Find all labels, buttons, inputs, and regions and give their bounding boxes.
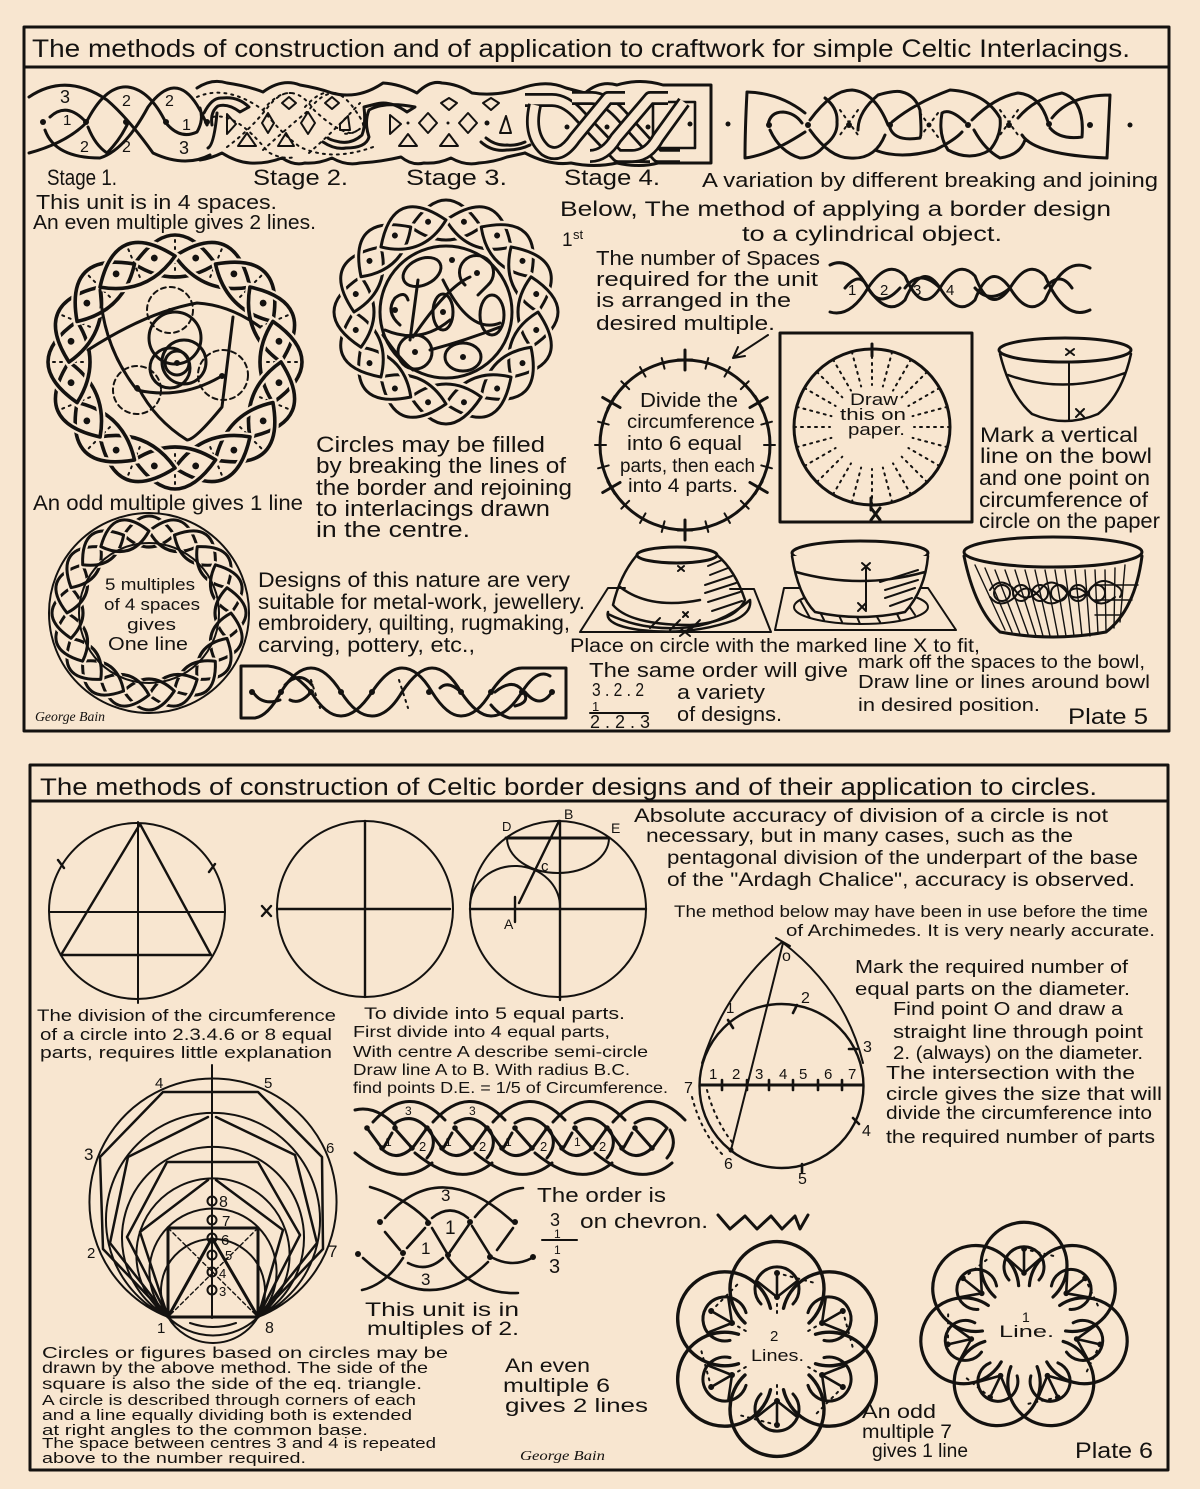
text: number of spaces: is arranged in the — [596, 290, 791, 312]
border stage 1: 2 — [122, 93, 131, 110]
arrow to circle — [733, 335, 768, 358]
diagram: division by diameter: 6 — [824, 1066, 832, 1083]
text: mark vertical: circumference of — [979, 489, 1148, 512]
text: circles or figures: at right angles to the common base. — [42, 1422, 368, 1439]
chevron icon — [718, 1215, 808, 1229]
text: mark required: Mark the required number of — [855, 957, 1129, 977]
text: divide caption: into 4 parts. — [628, 476, 738, 497]
text: unit multiples: multiples of 2. — [367, 1319, 519, 1340]
diagram: division by diameter: 1 — [709, 1066, 717, 1083]
text: mark required — [855, 957, 1162, 1147]
border: unit in multiples of 2: 3 — [441, 1186, 450, 1205]
text: number of spaces: The number of Spaces — [596, 248, 820, 270]
circle: divide circumference — [595, 350, 775, 540]
text: ring caption: gives — [127, 615, 176, 634]
text: method below: The method below may have been in use before the time — [674, 902, 1148, 921]
border stage 1: 2 — [165, 93, 174, 110]
diagram: nested polygons: 4 — [155, 1075, 163, 1092]
text: mark required: straight line through point — [893, 1022, 1143, 1042]
border stage 4 — [525, 82, 730, 166]
text: order — [537, 1185, 708, 1278]
text: division explanation: The division of the circumference — [37, 1006, 336, 1025]
stage labels: Stage 1. — [47, 165, 117, 190]
text: mark off: Draw line or lines around bowl — [858, 672, 1150, 692]
text: mark required: the required number of parts — [886, 1127, 1155, 1147]
diagram: division by diameter: 5 — [799, 1066, 807, 1083]
text: ring caption: 5 multiples — [105, 575, 195, 594]
panel: plate 6 — [30, 765, 1168, 1470]
diagram: division by diameter: 1 — [726, 1000, 734, 1017]
text: circles filled: Circles may be filled — [316, 432, 545, 457]
text: cylindrical heading — [560, 198, 1111, 251]
text: circles or figures: above to the number required. — [42, 1450, 306, 1467]
text: order: 3 — [550, 1210, 560, 1230]
stage labels: Stage 3. — [406, 165, 507, 190]
text: five equal parts: find points D.E. = 1/5 of Circumference. — [353, 1080, 668, 1097]
text: ring caption: of 4 spaces — [104, 595, 200, 614]
text: circles filled: to interlacings drawn — [316, 496, 550, 521]
text: odd multiple 7: multiple 7 — [862, 1422, 952, 1443]
border stage 1 — [29, 85, 210, 161]
diagram: nested polygons: 7 — [328, 1242, 337, 1261]
diagram: division by diameter: 2 — [801, 990, 810, 1007]
text: circles filled: by breaking the lines of — [316, 453, 567, 478]
bowl: with decorative band — [964, 537, 1142, 637]
circle: five division — [470, 806, 646, 1000]
diagram: division by diameter: 3 — [863, 1039, 872, 1056]
text: mark vertical: and one point on — [979, 467, 1150, 490]
diagram: nested polygons: 1 — [157, 1320, 165, 1337]
circle: cross division — [262, 821, 453, 997]
plate label 5: Plate 5 — [1068, 704, 1148, 729]
ring: six fold two lines: 2 — [770, 1328, 778, 1345]
text: mark vertical: Mark a vertical — [980, 424, 1138, 447]
border: unit in multiples of 2 — [355, 1186, 536, 1293]
text: even multiple: gives 2 lines — [505, 1396, 648, 1417]
text: cylindrical heading: 1 — [562, 230, 573, 251]
diagram: nested polygons: 2 — [87, 1245, 95, 1262]
text: absolute accuracy: of the "Ardagh Chalice", accuracy is observed. — [667, 870, 1135, 891]
diagram: division by diameter: 7 — [848, 1066, 856, 1083]
text: designs suitable: Designs of this nature are very — [258, 569, 571, 592]
border numbered spaces: 3 — [913, 282, 921, 299]
text: same order: 2 . 2 . 3 — [590, 712, 650, 732]
text: odd multiple: An odd multiple gives 1 line — [33, 492, 303, 515]
text: mark off: mark off the spaces to the bowl, — [858, 652, 1145, 672]
border: woven repeat: 3 — [405, 1104, 412, 1118]
border: unit in multiples of 2: 3 — [421, 1270, 430, 1289]
border: woven repeat: 1 — [574, 1135, 581, 1149]
text: same order: of designs. — [677, 704, 782, 726]
text: circles filled: the border and rejoining — [316, 475, 572, 500]
border stage 1: 3 — [179, 138, 189, 158]
text: same order: The same order will give — [589, 660, 848, 682]
text: five equal parts — [353, 1004, 668, 1097]
text: same order: 1 — [592, 699, 599, 714]
text: mark required: The intersection with the — [886, 1063, 1135, 1083]
diagram: nested polygons: 6 — [326, 1140, 334, 1157]
text: mark vertical: line on the bowl — [980, 445, 1152, 468]
text: order: The order is — [537, 1185, 666, 1207]
text: unit multiples — [365, 1300, 519, 1340]
text: mark required: equal parts on the diameter. — [855, 979, 1130, 999]
circle: five division: A — [504, 916, 514, 932]
text: designs suitable: suitable for metal-work, jewellery. — [258, 591, 585, 614]
text: mark required: Find point O and draw a — [893, 999, 1124, 1019]
paper square with circle — [780, 333, 972, 522]
title: plate 6: The methods of construction of Celtic border designs and of their application to circles. — [40, 774, 1097, 801]
ring: filled circle — [329, 195, 563, 429]
border: woven repeat: 2 — [479, 1139, 486, 1154]
text: designs suitable: carving, pottery, etc., — [258, 634, 475, 657]
ring: six fold two lines: Lines. — [751, 1346, 804, 1365]
diagram: nested polygons — [84, 1065, 337, 1343]
circle: five division: E — [611, 820, 620, 836]
text: same order: 3 . 2 . 2 — [592, 680, 644, 700]
border bottom — [241, 666, 566, 718]
circle: triangle division — [49, 822, 225, 1003]
text: even multiple: An even — [505, 1356, 590, 1377]
border: unit in multiples of 2: 1 — [445, 1218, 456, 1239]
paper square with circle: this on — [840, 405, 906, 424]
bowl: inverted on paper — [580, 547, 771, 636]
text: method below — [674, 902, 1155, 940]
panel: plate 5 — [24, 27, 1169, 732]
text: designs suitable: embroidery, quilting, rugmaking, — [258, 612, 570, 635]
text: unit spaces: An even multiple gives 2 lines. — [33, 212, 316, 234]
text: circles or figures — [42, 1345, 448, 1467]
diagram: nested polygons: 4 — [219, 1266, 226, 1281]
text: cylindrical heading: st — [573, 227, 584, 242]
text: circles or figures: drawn by the above method. The side of the — [42, 1360, 428, 1377]
ring: seven fold one line: Line. — [999, 1322, 1054, 1341]
diagram: nested polygons: 5 — [225, 1248, 232, 1263]
text: odd multiple 7: gives 1 line — [872, 1441, 968, 1462]
diagram: division by diameter: 5 — [798, 1171, 807, 1188]
text: absolute accuracy — [634, 806, 1138, 891]
text: divide caption: Divide the — [640, 390, 738, 412]
text: divide caption: into 6 equal — [627, 433, 742, 455]
text: order: 3 — [549, 1256, 560, 1278]
text: order: on chevron. — [580, 1211, 708, 1233]
ring: six fold two lines — [660, 1242, 894, 1456]
text: five equal parts: With centre A describe semi-circle — [353, 1044, 648, 1061]
diagram: nested polygons: 6 — [221, 1232, 229, 1249]
stage labels: Stage 4. — [564, 165, 660, 190]
text: circles filled — [316, 432, 572, 542]
text: circles or figures: A circle is described through corners of each — [42, 1392, 416, 1409]
text: divide caption: parts, then each — [620, 456, 755, 477]
stage labels: A variation by different breaking and joining — [702, 170, 1158, 192]
text: circles or figures: square is also the side of the eq. triangle. — [42, 1376, 422, 1393]
text: number of spaces: desired multiple. — [596, 313, 775, 335]
diagram: division by diameter — [684, 938, 872, 1188]
text: number of spaces — [596, 248, 820, 335]
text: mark off — [858, 652, 1150, 715]
border: woven repeat: 1 — [505, 1135, 512, 1149]
text: five equal parts: First divide into 4 equal parts, — [353, 1024, 610, 1041]
text: division explanation: of a circle into 2.3.4.6 or 8 equal — [40, 1025, 332, 1044]
border stage 1: 1 — [182, 117, 191, 134]
ring: even multiple — [42, 229, 308, 495]
title: plate 5: The methods of construction and of application to craftwork for simple Celtic Interlacings. — [32, 35, 1130, 63]
border numbered spaces: 2 — [880, 282, 888, 299]
text: mark off: in desired position. — [858, 695, 1040, 715]
text: circles or figures: The space between centres 3 and 4 is repeated — [42, 1435, 436, 1452]
circle: five division: D — [502, 819, 511, 834]
text: five equal parts: To divide into 5 equal parts. — [364, 1004, 625, 1023]
diagram: division by diameter: 4 — [779, 1066, 787, 1083]
text: ring caption: One line — [108, 634, 188, 654]
ring: seven fold one line — [912, 1222, 1136, 1440]
plate label 6: Plate 6 — [1075, 1438, 1153, 1463]
text: cylindrical heading: Below, The method of applying a border design — [560, 198, 1111, 221]
bowl: upright on paper — [775, 541, 956, 630]
border: woven repeat: 2 — [540, 1139, 547, 1154]
paper square with circle: Draw — [850, 390, 899, 409]
text: mark required: 2. (always) on the diameter. — [893, 1043, 1143, 1063]
border: woven repeat: 2 — [599, 1139, 606, 1154]
border stage 1: 2 — [122, 139, 131, 156]
border stage 1: 2 — [80, 139, 89, 156]
circle: five division: c — [541, 858, 549, 875]
circle: five division: B — [564, 806, 573, 822]
text: even multiple: multiple 6 — [503, 1376, 610, 1397]
text: circles filled: in the centre. — [316, 517, 470, 542]
text: circles or figures: and a line equally dividing both is extended — [42, 1407, 412, 1424]
text: same order — [589, 660, 848, 732]
stage labels — [47, 165, 1158, 192]
text: mark vertical — [979, 424, 1160, 533]
border numbered spaces: 4 — [946, 282, 954, 299]
diagram: division by diameter: 6 — [724, 1156, 733, 1173]
text: even multiple — [503, 1356, 648, 1417]
border stage 1: 1 — [63, 112, 71, 129]
border stages 2 and 3 — [197, 81, 585, 164]
diagram: nested polygons: 3 — [84, 1145, 93, 1164]
text: mark vertical: circle on the paper — [979, 510, 1160, 533]
text: five equal parts: Draw line A to B. With radius B.C. — [353, 1062, 630, 1079]
text: absolute accuracy: pentagonal division of the underpart of the base — [667, 848, 1138, 869]
diagram: nested polygons: 5 — [264, 1075, 272, 1092]
text: divide caption: circumference — [627, 412, 755, 433]
text: order: 1 — [554, 1243, 561, 1257]
stage labels: Stage 2. — [253, 165, 348, 190]
text: mark required: divide the circumference into — [886, 1103, 1152, 1123]
signature: plate 6: George Bain — [520, 1449, 605, 1464]
text: ring caption — [104, 575, 200, 654]
text: mark required: circle gives the size that will — [886, 1084, 1162, 1104]
text: number of spaces: required for the unit — [596, 269, 819, 291]
diagram: nested polygons: 8 — [265, 1320, 274, 1337]
border numbered spaces — [830, 263, 1090, 313]
bowl: marked — [999, 338, 1131, 421]
text: method below: of Archimedes. It is very nearly accurate. — [786, 921, 1155, 940]
text: unit multiples: This unit is in — [365, 1300, 519, 1321]
text: division explanation: parts, requires little explanation — [40, 1043, 332, 1062]
text: odd multiple 7: An odd — [862, 1402, 936, 1423]
text: unit spaces: This unit is in 4 spaces. — [36, 192, 277, 214]
diagram: division by diameter: o — [782, 948, 791, 965]
text: division explanation — [37, 1006, 336, 1062]
border: woven repeat: 2 — [419, 1139, 426, 1154]
ring: five multiples — [49, 513, 249, 713]
text: absolute accuracy: Absolute accuracy of division of a circle is not — [634, 806, 1109, 827]
signature: plate 5: George Bain — [35, 710, 105, 725]
diagram: division by diameter: 2 — [732, 1066, 740, 1083]
border: woven repeat: 3 — [469, 1104, 476, 1118]
border variation — [745, 90, 1132, 158]
text: designs suitable — [258, 569, 585, 657]
ring: seven fold one line: 1 — [1022, 1309, 1030, 1325]
diagram: nested polygons: 7 — [222, 1213, 230, 1230]
border: woven repeat: 1 — [445, 1135, 452, 1149]
paper square with circle: paper. — [848, 420, 905, 439]
text: place on circle: Place on circle with the marked line X to fit, — [570, 636, 980, 657]
text: divide caption — [620, 390, 755, 497]
text: cylindrical heading: to a cylindrical object. — [742, 223, 1002, 246]
diagram: nested polygons: 8 — [219, 1194, 228, 1211]
text: same order: a variety — [677, 682, 765, 704]
text: unit spaces — [33, 192, 316, 234]
text: circles or figures: Circles or figures based on circles may be — [42, 1345, 448, 1362]
diagram: division by diameter: 7 — [684, 1080, 693, 1097]
border: woven repeat — [355, 1101, 685, 1174]
diagram: division by diameter: 3 — [755, 1066, 763, 1083]
border stage 1: 3 — [60, 87, 70, 107]
diagram: division by diameter: 4 — [862, 1123, 871, 1140]
text: odd multiple 7 — [862, 1402, 968, 1462]
diagram: nested polygons: 3 — [219, 1284, 226, 1299]
border: woven repeat: 1 — [385, 1135, 392, 1149]
text: absolute accuracy: necessary, but in many cases, such as the — [646, 826, 1073, 847]
border: unit in multiples of 2: 1 — [421, 1239, 430, 1258]
text: order: 1 — [554, 1227, 561, 1241]
border numbered spaces: 1 — [848, 282, 856, 299]
